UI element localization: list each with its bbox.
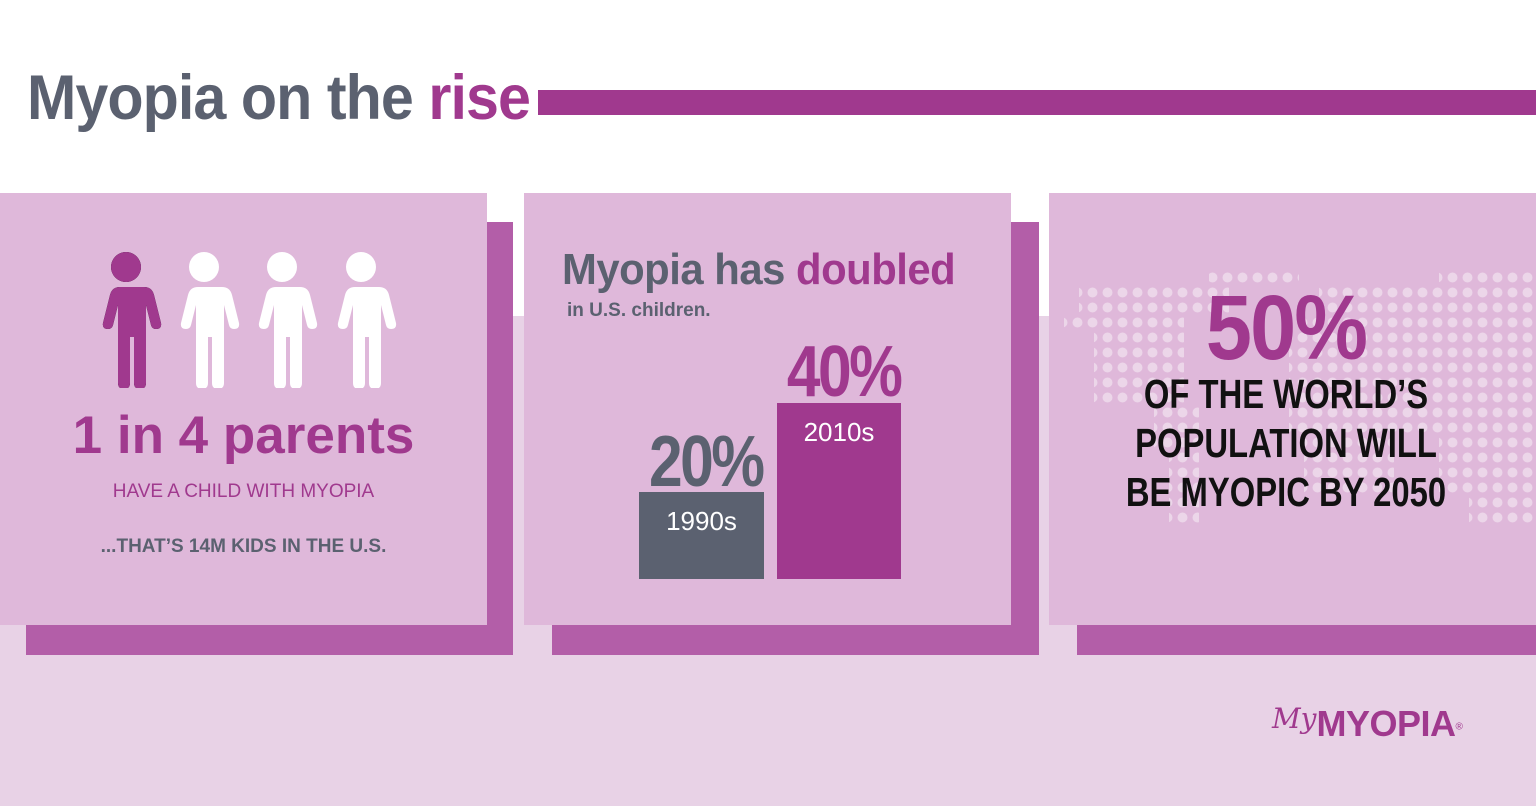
big stat: 50% (1206, 277, 1366, 379)
bar chart: 2010s (804, 417, 874, 447)
note: ...THAT’S 14M KIDS IN THE U.S. (101, 536, 386, 557)
bar chart: 20% (649, 422, 762, 502)
statement: OF THE WORLD’S (1144, 371, 1428, 417)
bar chart: 1990s (666, 506, 737, 536)
heading: Myopia has doubled (562, 245, 955, 294)
stat heading: 1 in 4 parents (73, 406, 414, 465)
bar chart: 40% (787, 332, 900, 412)
panel: world (1049, 193, 1536, 625)
bar chart (639, 332, 902, 579)
subheading: in U.S. children. (567, 300, 711, 321)
statement: BE MYOPIC BY 2050 (1126, 469, 1446, 515)
statement: POPULATION WILL (1135, 420, 1437, 466)
panel: parents (0, 193, 487, 625)
panel: doubled (524, 193, 1011, 625)
logo: MyMYOPIA® (1272, 702, 1463, 744)
subtext: HAVE A CHILD WITH MYOPIA (113, 481, 374, 502)
title bar (538, 90, 1536, 115)
title: Myopia on the rise (27, 63, 530, 133)
icon: people (102, 252, 396, 388)
statement (1126, 371, 1446, 515)
icon: dotted world map (1064, 272, 1532, 522)
panel shadows (26, 222, 513, 655)
